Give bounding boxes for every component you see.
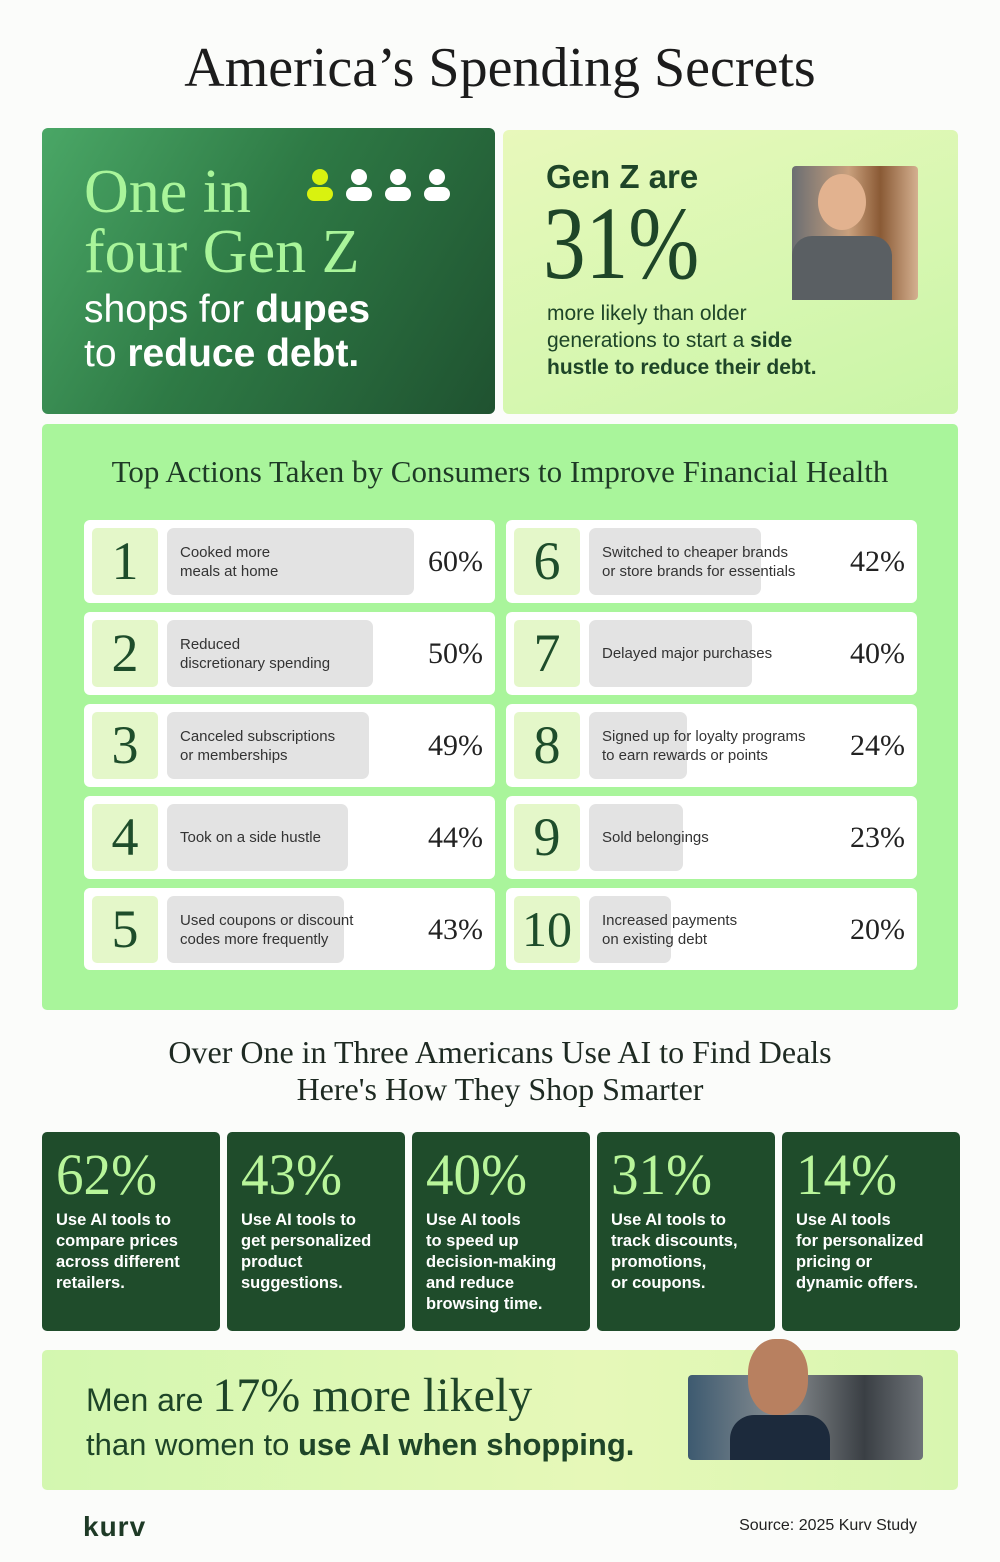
text: side hustle: generations to start a side [547,329,792,352]
heading: one in four: One in [84,158,251,226]
stat card 40%: Use AI tools [426,1211,521,1229]
row 7 [506,612,917,695]
photo: woman [792,166,918,300]
logo: kurv: kurv [83,1511,146,1542]
stat card 62%: Use AI tools to [56,1211,171,1229]
text: side hustle: hustle to reduce their debt. [547,356,817,379]
title: America’s Spending Secrets [184,37,816,99]
row 8: Signed up for loyalty programs [602,728,805,744]
text: shops for dupes: shops for dupes [84,288,370,331]
photo: man [688,1375,923,1460]
row 1: 60% [428,545,483,578]
stat card 14%: Use AI tools [796,1211,891,1229]
row 1: 1 [112,531,138,591]
stat card 43%: product [241,1253,302,1271]
row 10: 10 [522,901,572,957]
row 8: 24% [850,729,905,762]
stat card 62% [42,1132,220,1331]
stat card 14%: dynamic offers. [796,1274,918,1292]
row 2: 2 [112,623,138,683]
stat card 62%: across different [56,1253,180,1271]
text: men: Men are 17% more likely [86,1369,532,1422]
stat card 31%: Use AI tools to [611,1211,726,1229]
row 6: or store brands for essentials [602,562,795,580]
row 8 [506,704,917,787]
row 3: or memberships [180,746,288,764]
row 6 [506,520,917,603]
row 1: meals at home [180,562,278,580]
row 4 [84,796,495,879]
stat card 40%: browsing time. [426,1295,542,1313]
row 10: 20% [850,913,905,946]
row 9: 23% [850,821,905,854]
row 5: codes more frequently [180,930,328,948]
row 6: 42% [850,545,905,578]
row 7: 40% [850,637,905,670]
row 2: Reduced [180,636,240,652]
row 8: to earn rewards or points [602,746,768,764]
row 2: 50% [428,637,483,670]
row 9: Sold belongings [602,829,709,846]
heading: AI [168,1034,832,1107]
heading: top actions: Top Actions Taken by Consumers to Improve Financial Health [112,454,888,489]
text: shops for dupes [84,288,370,375]
stat card 62%: compare prices [56,1232,178,1250]
panel: top actions [42,424,958,1010]
row 3: Canceled subscriptions [180,728,335,744]
text: men: than women to use AI when shopping. [86,1427,634,1462]
row 9: 9 [534,807,560,867]
text: side hustle: more likely than older [547,302,747,325]
stat card 40%: decision-making [426,1253,556,1271]
row 2 [84,612,495,695]
row 10: Increased payments [602,912,737,928]
stat card 31%: track discounts, [611,1232,738,1250]
stat card 40% [412,1132,590,1331]
row 8: 8 [534,715,560,775]
text: shops for dupes: to reduce debt. [84,332,359,375]
stat: 31%: 31% [543,186,699,301]
stat card 43%: Use AI tools to [241,1211,356,1229]
stat card 14%: 14% [796,1142,897,1207]
row 10 [506,888,917,970]
row 7: Delayed major purchases [602,645,772,662]
heading: AI: Over One in Three Americans Use AI to Find Deals [168,1034,832,1070]
row 5: Used coupons or discount [180,912,353,928]
stat card 31% [597,1132,775,1331]
panel: gen z 31% [503,130,958,414]
icon: people [307,169,450,201]
heading: gen z are: Gen Z are [546,158,698,195]
stat card 40%: 40% [426,1142,527,1207]
source: Source: 2025 Kurv Study [739,1517,917,1534]
text: men [86,1369,634,1462]
row 1: Cooked more [180,544,270,560]
row 5: 5 [112,899,138,959]
stat card 43%: get personalized [241,1232,371,1250]
heading: AI: Here's How They Shop Smarter [297,1071,703,1107]
heading: one in four [84,158,359,286]
stat card 43% [227,1132,405,1331]
stat card 14%: for personalized [796,1232,923,1250]
row 4: 4 [112,807,138,867]
stat card 31%: 31% [611,1142,712,1207]
stat card 62%: 62% [56,1142,157,1207]
stat card 31%: or coupons. [611,1274,705,1292]
stat card 14% [782,1132,960,1331]
text: side hustle [547,302,817,379]
stat card 62%: retailers. [56,1274,125,1292]
row 3: 3 [112,715,138,775]
stat card 31%: promotions, [611,1253,706,1271]
banner: men 17% [42,1350,958,1490]
stat card 14%: pricing or [796,1253,872,1271]
row 9 [506,796,917,879]
stat card 40%: and reduce [426,1274,514,1292]
row 5: 43% [428,913,483,946]
row 6: 6 [534,531,560,591]
row 7: 7 [534,623,560,683]
row 10: on existing debt [602,930,707,948]
row 5 [84,888,495,970]
stat card 43%: 43% [241,1142,342,1207]
row 3: 49% [428,729,483,762]
row 4: Took on a side hustle [180,829,321,846]
panel: one in four gen z [42,128,495,414]
stat card 43%: suggestions. [241,1274,343,1292]
row 6: Switched to cheaper brands [602,544,788,560]
row 4: 44% [428,821,483,854]
row 3 [84,704,495,787]
heading: one in four: four Gen Z [84,218,359,286]
row 1 [84,520,495,603]
stat card 40%: to speed up [426,1232,519,1250]
row 2: discretionary spending [180,654,330,672]
